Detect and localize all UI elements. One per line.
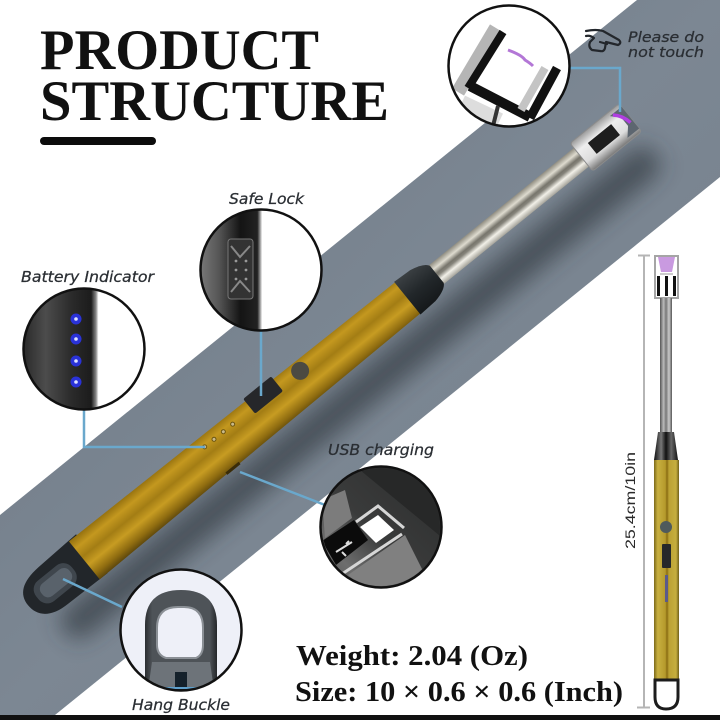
title: PRODUCT: [40, 19, 319, 82]
leader lines: [63, 68, 620, 607]
side view buckle: [655, 680, 678, 709]
side view LEDs: [665, 575, 668, 602]
ignition head: [570, 104, 642, 171]
specifications text: [295, 640, 623, 708]
side view collar: [654, 432, 678, 460]
detail circle: safe lock: [200, 210, 322, 330]
title underline: [40, 137, 156, 145]
dimension line: 25.4cm/10in: [623, 452, 638, 549]
title: [40, 19, 389, 133]
detail circle: hang buckle: [120, 570, 242, 700]
round button: [287, 358, 313, 383]
side view head: [655, 256, 678, 298]
USB port: [225, 462, 241, 475]
side view switch: [662, 544, 671, 568]
main lighter, diagonal: [12, 98, 667, 646]
blue LEDs: [70, 314, 82, 388]
label: please do not touch: Please do: [628, 30, 704, 46]
label: safe lock: Safe Lock: [229, 190, 305, 208]
LED dots: [202, 421, 235, 450]
label: please do not touch: [628, 30, 704, 61]
pen shadow: [54, 140, 667, 646]
safe lock switch: [243, 376, 283, 414]
side view lighter: [654, 256, 679, 709]
side view gold body: [654, 460, 679, 680]
specifications text: Size: 10 × 0.6 × 0.6 (Inch): [295, 676, 623, 708]
dimension line: [623, 255, 650, 708]
gold body: [69, 277, 426, 579]
detail circle: arc tip: [448, 6, 570, 130]
detail circle: battery indicator: [24, 288, 144, 410]
icon: pointing hand: [586, 30, 620, 51]
label: battery indicator: Battery Indicator: [21, 268, 155, 286]
title: STRUCTURE: [40, 70, 389, 133]
hang buckle end: [12, 534, 108, 625]
specifications text: Weight: 2.04 (Oz): [296, 640, 528, 672]
side view flexible tube: [660, 298, 672, 432]
side view button: [660, 521, 672, 533]
bottom black bar: [0, 715, 720, 720]
top collar: [394, 258, 450, 315]
label: please do not touch: not touch: [628, 45, 704, 61]
detail circle: USB charging: [320, 465, 445, 600]
label: hang buckle: Hang Buckle: [132, 696, 230, 714]
extension tube: [422, 147, 590, 289]
label: USB charging: USB charging: [328, 441, 434, 459]
